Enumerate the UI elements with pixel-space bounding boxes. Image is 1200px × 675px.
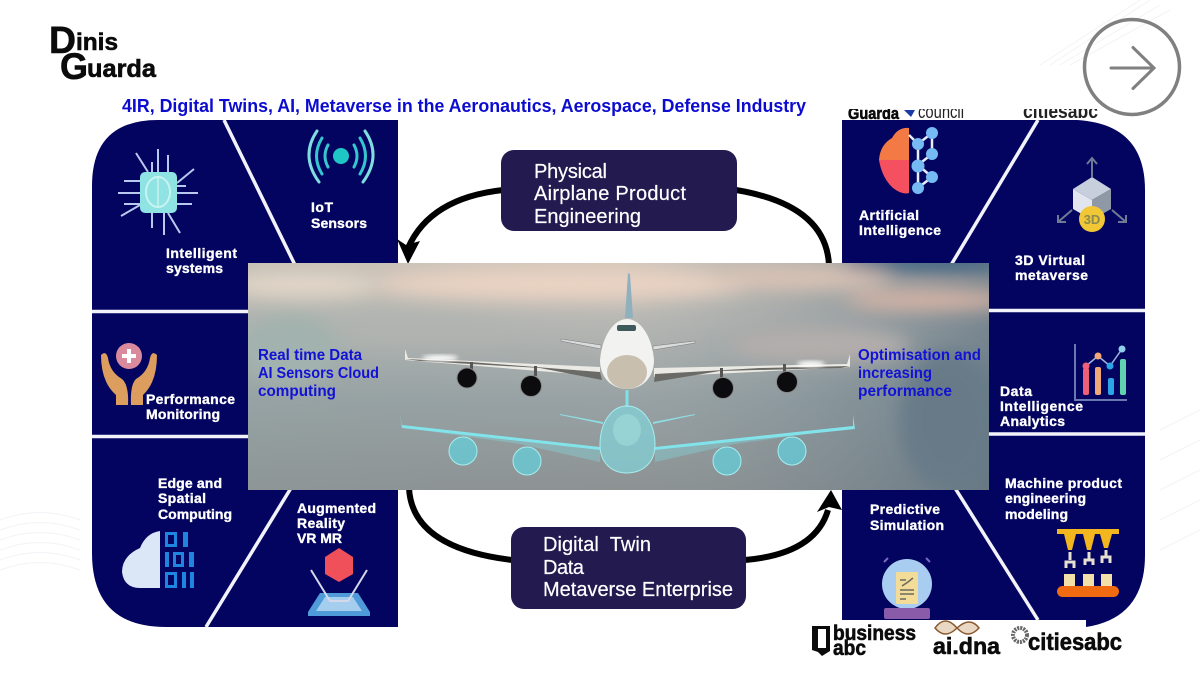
label: Data Intelligence Analytics: Intelligence bbox=[1000, 398, 1083, 414]
label: Intelligent systems bbox=[166, 245, 237, 276]
box: Physical Airplane Product Engineering: Airplane Product bbox=[534, 183, 686, 205]
logo: citiesabc: citiesabc bbox=[1028, 629, 1122, 656]
icon: analytics chart bbox=[1075, 344, 1127, 400]
logo: Dinis Guarda: inis bbox=[76, 29, 118, 56]
partner logos cropped above right panel bbox=[848, 109, 1098, 120]
arrow: bottom left curve from image bbox=[409, 488, 512, 560]
box: Digital Twin Data Metaverse Enterprise bbox=[511, 527, 746, 609]
label: Data Intelligence Analytics bbox=[1000, 383, 1083, 429]
icon: machine robot arms bbox=[1057, 529, 1119, 597]
label: Predictive Simulation: Predictive bbox=[870, 501, 940, 517]
label: Real time Data AI Sensors Cloud computing: Real time Data bbox=[258, 347, 362, 364]
label: Real time Data AI Sensors Cloud computing: computing bbox=[258, 383, 336, 400]
box: Physical Airplane Product Engineering: Engineering bbox=[534, 206, 641, 228]
image: airplane and digital twin in sky bbox=[248, 263, 989, 490]
icon: next arrow in circle bbox=[1084, 20, 1180, 114]
logo: Dinis Guarda: uarda bbox=[87, 55, 157, 83]
logo: ai.dna bbox=[933, 621, 1000, 659]
partner logos cropped above right panel: Guarda bbox=[848, 104, 899, 123]
label: Machine product engineering modeling: modeling bbox=[1005, 506, 1068, 522]
title: 4IR, Digital Twins, AI, Metaverse in the Aeronautics, Aerospace, Defense Industry bbox=[122, 96, 806, 116]
logo: Dinis Guarda: G bbox=[60, 46, 88, 87]
box: Digital Twin Data Metaverse Enterprise: Metaverse Enterprise bbox=[543, 579, 733, 601]
label: Optimisation and increasing performance: increasing bbox=[858, 365, 932, 382]
label: Optimisation and increasing performance: performance bbox=[858, 383, 952, 400]
label: Artificial Intelligence: Artificial bbox=[859, 207, 919, 223]
label: Edge and Spatial Computing bbox=[158, 475, 232, 522]
illustration: digital twin airplane bbox=[400, 390, 855, 475]
label: Augmented Reality VR MR bbox=[297, 500, 376, 546]
arrow: top left curve into left panel bbox=[397, 190, 503, 264]
label: Predictive Simulation: Simulation bbox=[870, 517, 944, 533]
label: Predictive Simulation bbox=[870, 501, 944, 533]
label: Artificial Intelligence bbox=[859, 207, 941, 238]
label: Augmented Reality VR MR: Reality bbox=[297, 515, 345, 531]
label: Augmented Reality VR MR: Augmented bbox=[297, 500, 376, 516]
icon: IoT sensor waves bbox=[309, 131, 373, 182]
box: Digital Twin Data Metaverse Enterprise: Digital Twin bbox=[543, 534, 651, 556]
box: Physical Airplane Product Engineering bbox=[501, 150, 737, 231]
icon: cloud and binary bbox=[122, 531, 194, 588]
label: Performance Monitoring: Performance bbox=[146, 391, 235, 407]
label: Augmented Reality VR MR: VR MR bbox=[297, 530, 342, 546]
box: Physical Airplane Product Engineering: Physical bbox=[534, 161, 607, 183]
label: Performance Monitoring: Monitoring bbox=[146, 406, 220, 422]
label: 3D Virtual metaverse: 3D Virtual bbox=[1015, 252, 1085, 268]
logo: business abc: abc bbox=[833, 637, 866, 660]
panel: right technologies bbox=[842, 120, 1145, 627]
label: Machine product engineering modeling bbox=[1005, 475, 1122, 522]
logo: business abc bbox=[812, 622, 916, 660]
label: Edge and Spatial Computing: Edge and bbox=[158, 475, 222, 491]
icon: 3D cube bbox=[1058, 158, 1126, 232]
icon: AI chip bbox=[118, 149, 198, 235]
logo: business abc: business bbox=[833, 622, 916, 645]
label: Intelligent systems: Intelligent bbox=[166, 245, 237, 261]
box: Digital Twin Data Metaverse Enterprise: Data bbox=[543, 557, 585, 579]
label: Data Intelligence Analytics: Analytics bbox=[1000, 413, 1065, 429]
arrow: top right curve from box bbox=[736, 190, 829, 265]
label: IoT Sensors: IoT bbox=[311, 199, 333, 215]
label: 3D Virtual metaverse: metaverse bbox=[1015, 267, 1088, 283]
label: Real time Data AI Sensors Cloud computing: AI Sensors Cloud bbox=[258, 365, 379, 382]
icon: AI brain network bbox=[879, 127, 938, 194]
label: 3D Virtual metaverse bbox=[1015, 252, 1088, 283]
panel background left bbox=[92, 120, 398, 627]
icon: crystal ball simulation bbox=[882, 558, 932, 619]
label: Artificial Intelligence: Intelligence bbox=[859, 222, 941, 238]
icon: 3D cube: 3D bbox=[1084, 212, 1100, 227]
label: Intelligent systems: systems bbox=[166, 260, 223, 276]
label: Data Intelligence Analytics: Data bbox=[1000, 383, 1032, 399]
partner logos cropped above right panel: citiesabc bbox=[1023, 101, 1098, 123]
label: Optimisation and increasing performance: Optimisation and bbox=[858, 347, 981, 364]
label: Edge and Spatial Computing: Computing bbox=[158, 506, 232, 522]
icon: augmented reality cube bbox=[308, 548, 370, 616]
label: Performance Monitoring bbox=[146, 391, 235, 422]
partner logos cropped above right panel: council bbox=[918, 102, 964, 122]
panel: left technologies bbox=[92, 120, 398, 627]
logo: Dinis Guarda: D bbox=[49, 20, 76, 62]
icon: performance hands bbox=[101, 343, 157, 405]
label: IoT Sensors: Sensors bbox=[311, 215, 367, 231]
label: IoT Sensors bbox=[311, 199, 367, 231]
arrow: bottom right curve up to right panel bbox=[745, 490, 842, 560]
label: Machine product engineering modeling: engineering bbox=[1005, 490, 1086, 506]
logo: ai.dna: ai.dna bbox=[933, 633, 1000, 659]
label: Optimisation and increasing performance bbox=[858, 347, 981, 400]
illustration: physical airplane bbox=[405, 273, 850, 398]
label: Edge and Spatial Computing: Spatial bbox=[158, 490, 206, 506]
label: Real time Data AI Sensors Cloud computing bbox=[258, 347, 379, 400]
label: Machine product engineering modeling: Machine product bbox=[1005, 475, 1122, 491]
panel background right bbox=[842, 120, 1145, 627]
logo: Dinis Guarda bbox=[49, 20, 157, 87]
